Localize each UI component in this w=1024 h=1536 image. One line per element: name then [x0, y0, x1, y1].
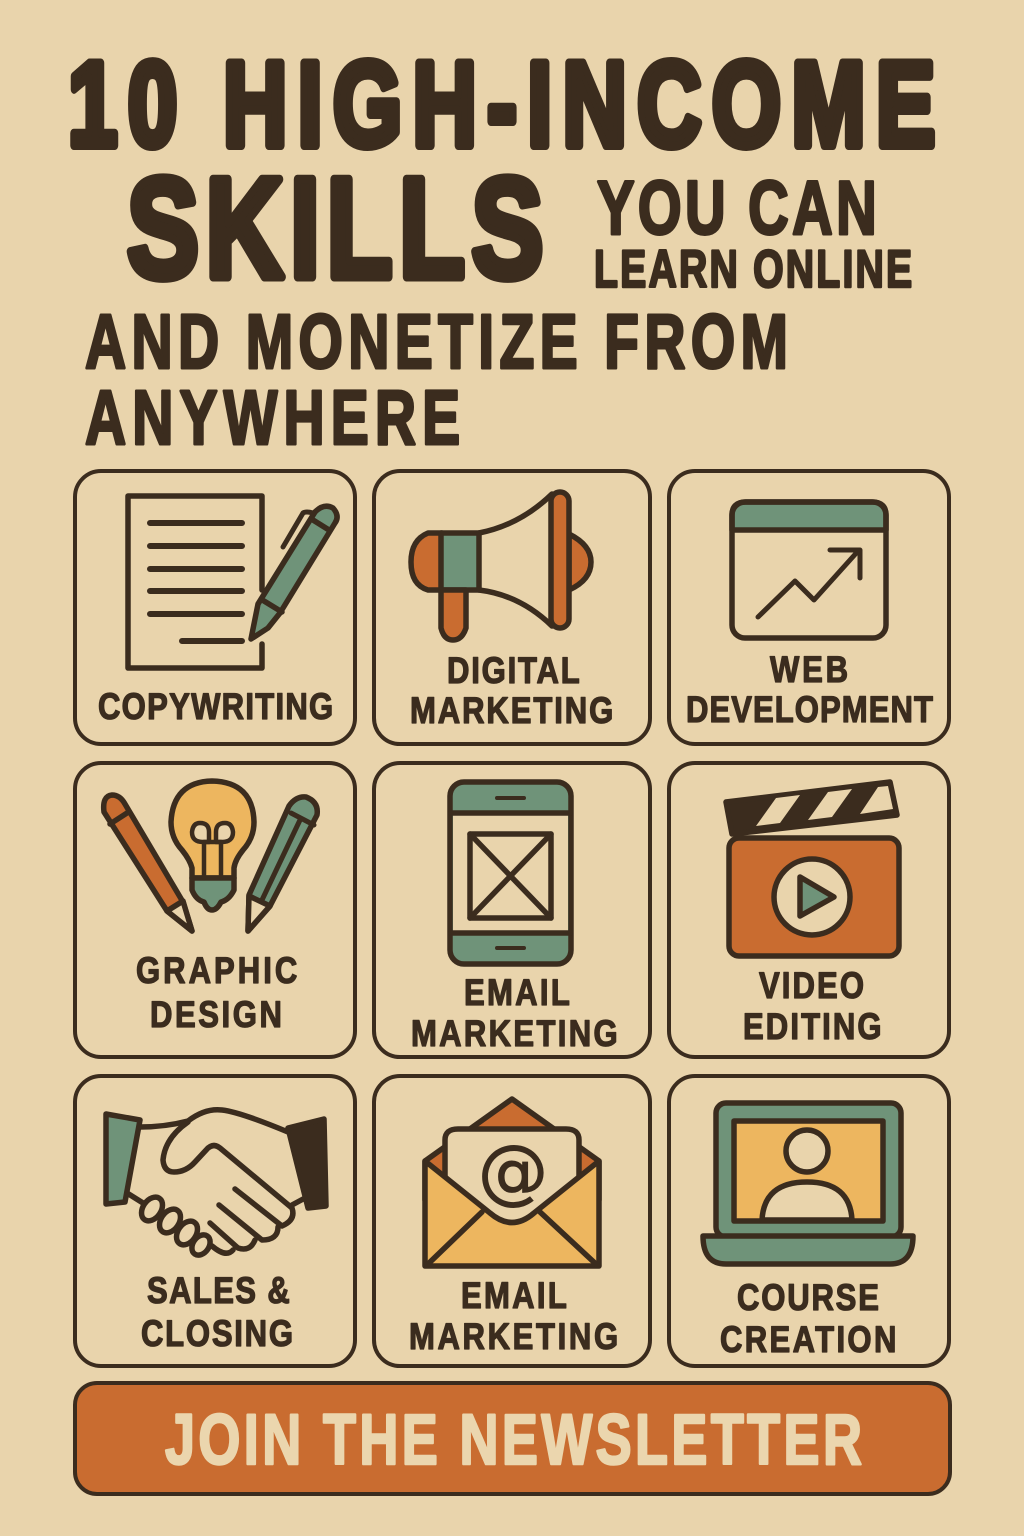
icon: lightbulb with pencils	[104, 781, 317, 931]
panel: graphic design	[75, 763, 355, 1057]
label: course creation: CREATION	[720, 1320, 896, 1361]
label: web development: WEB	[770, 650, 848, 691]
panel: email marketing (phone)	[374, 763, 650, 1057]
icon: clapperboard	[726, 782, 899, 956]
subtitle: AND MONETIZE FROM	[85, 300, 788, 385]
label: digital marketing: DIGITAL	[447, 651, 580, 692]
icon: envelope with at sign	[425, 1099, 599, 1266]
label: digital marketing	[410, 651, 613, 732]
label: web development: DEVELOPMENT	[686, 690, 933, 731]
label: video editing	[743, 966, 882, 1048]
panel: video editing	[669, 763, 949, 1057]
icon: phone	[450, 782, 571, 964]
label: sales and closing: SALES &	[147, 1271, 290, 1312]
label: course creation	[720, 1278, 896, 1361]
label: web development	[686, 650, 933, 731]
title	[68, 38, 935, 307]
icon: document and pen	[128, 496, 337, 668]
label: course creation: COURSE	[737, 1278, 879, 1319]
title: SKILLS	[127, 149, 543, 307]
title: 10 HIGH-INCOME	[68, 38, 935, 172]
title: YOU CAN	[597, 166, 877, 251]
button: join the newsletter	[75, 1383, 950, 1494]
label: email marketing	[409, 1276, 618, 1358]
label: email marketing: MARKETING	[409, 1317, 618, 1358]
label: graphic design: GRAPHIC	[136, 951, 297, 992]
icon: laptop with instructor	[703, 1103, 913, 1264]
subtitle: ANYWHERE	[85, 376, 460, 461]
panel: course creation	[669, 1076, 949, 1366]
label: graphic design	[136, 951, 297, 1036]
title: LEARN ONLINE	[594, 239, 912, 298]
label: sales and closing	[141, 1271, 293, 1355]
icon: browser with growth arrow	[732, 502, 886, 638]
button: join the newsletter: JOIN THE NEWSLETTER	[165, 1401, 862, 1480]
subtitle	[85, 300, 788, 461]
label: sales and closing: CLOSING	[141, 1314, 293, 1355]
label: email marketing	[411, 973, 618, 1055]
panel: email marketing (envelope)	[374, 1076, 650, 1366]
icon: handshake	[106, 1110, 326, 1259]
label: copywriting: COPYWRITING	[98, 687, 333, 728]
panel: digital marketing	[374, 471, 650, 744]
panel: web development	[669, 471, 949, 744]
icon: megaphone	[411, 492, 591, 640]
panel: copywriting	[75, 471, 355, 744]
panel: sales and closing	[75, 1076, 355, 1366]
icon: envelope with at sign: @	[478, 1130, 548, 1212]
label: email marketing: MARKETING	[411, 1014, 618, 1055]
label: video editing: EDITING	[743, 1007, 882, 1048]
label: email marketing: EMAIL	[464, 973, 570, 1014]
label: email marketing: EMAIL	[461, 1276, 567, 1317]
label: video editing: VIDEO	[759, 966, 864, 1007]
label: digital marketing: MARKETING	[410, 691, 613, 732]
label: graphic design: DESIGN	[150, 995, 282, 1036]
